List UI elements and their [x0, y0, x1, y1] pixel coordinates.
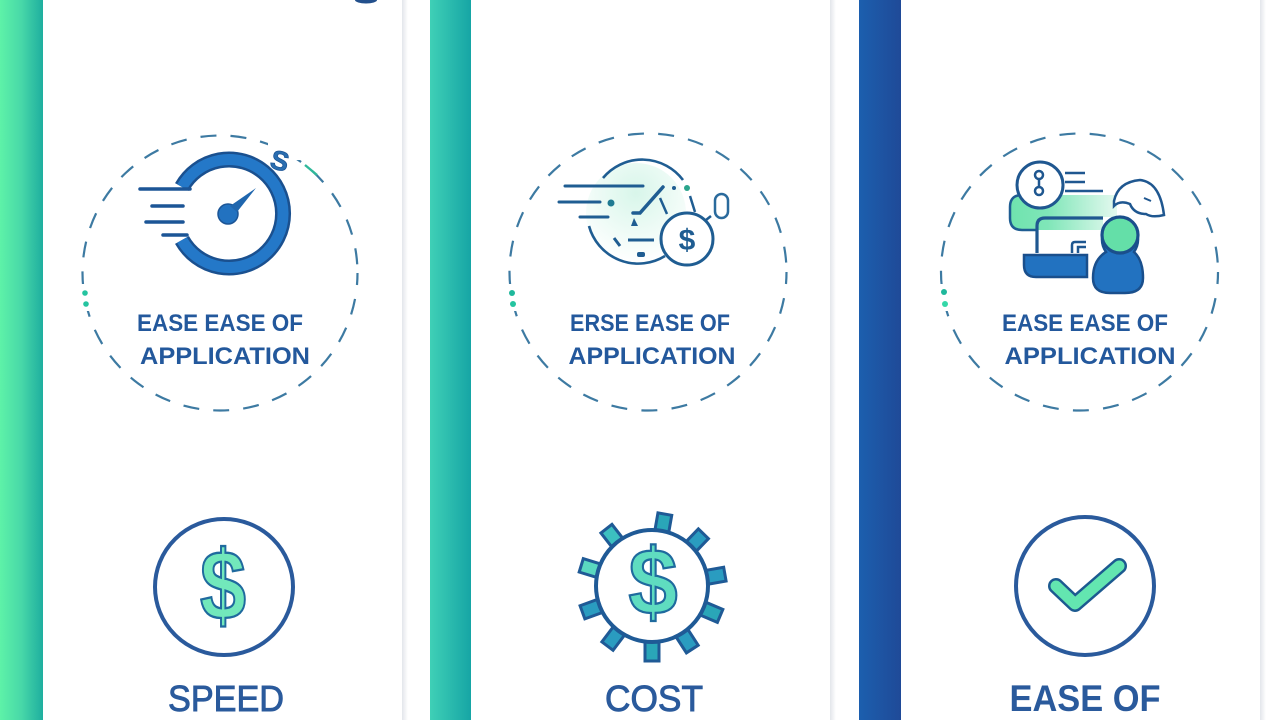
icon: dollar gear	[579, 513, 726, 661]
panel: ease of application column: APPLICATION	[1004, 343, 1176, 370]
icon: dollar gear: $	[628, 531, 678, 635]
icon: laptop and user	[1010, 162, 1164, 293]
dashed ring: laptop and user badge	[936, 134, 1218, 410]
icon: check mark	[1016, 517, 1154, 655]
accent strip: cost panel	[430, 0, 471, 720]
icon: stopwatch	[140, 144, 292, 268]
card: ease panel	[902, 0, 1260, 720]
accent strip: speed panel	[0, 0, 43, 720]
label: ease ease of application: EASE EASE OF	[137, 310, 303, 337]
label: erse ease of application: ERSE EASE OF	[570, 310, 730, 337]
panel: cost column	[430, 0, 836, 720]
icon: dollar coin: $	[200, 531, 246, 641]
card: cost panel	[472, 0, 830, 720]
icon: stopwatch: S	[267, 144, 292, 178]
panel: cost column: APPLICATION	[568, 343, 736, 370]
card: speed panel	[44, 0, 402, 720]
accent strip: ease panel	[859, 0, 901, 720]
heading: speed: SPEED	[168, 678, 284, 719]
icon: clock with coin	[559, 160, 728, 265]
label: ease ease of application: EASE EASE OF	[1002, 310, 1168, 337]
panel: speed column	[0, 0, 408, 720]
dashed ring: stopwatch badge	[76, 136, 358, 410]
heading: ease of: EASE OF	[1010, 678, 1160, 719]
icon: dollar coin	[155, 519, 293, 655]
dashed ring: clock and coin badge	[504, 134, 786, 410]
icon: clock with coin: $	[679, 224, 696, 257]
panel: speed column: APPLICATION	[140, 343, 310, 370]
heading: cost: COST	[605, 678, 703, 719]
panel: ease of application column	[859, 0, 1266, 720]
